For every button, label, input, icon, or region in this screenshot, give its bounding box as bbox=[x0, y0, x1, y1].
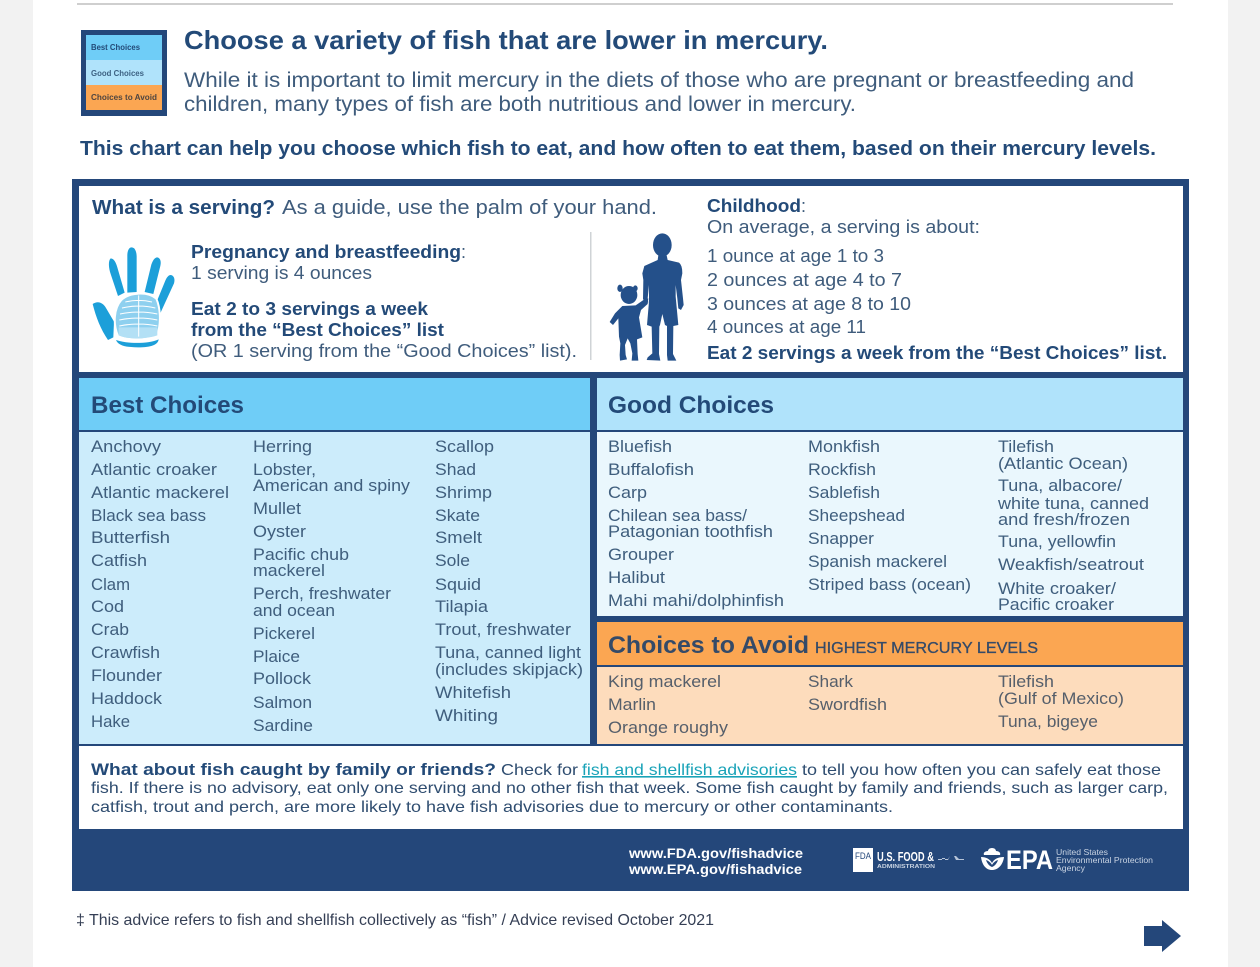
icon: chart legend thumbnail: Best Choices bbox=[91, 43, 141, 52]
icon: chart legend thumbnail: Choices to Avoid bbox=[91, 93, 157, 102]
good choices column 1: Mahi mahi/dolphinfish bbox=[608, 591, 784, 610]
best choices column 2: mackerel bbox=[253, 561, 325, 580]
best choices column 2 bbox=[253, 437, 411, 735]
icon: two children silhouette bbox=[610, 233, 684, 361]
best choices column 1: Atlantic mackerel bbox=[91, 483, 229, 502]
icon: EPA logo: Agency bbox=[1056, 863, 1086, 873]
panel: fish caught by family or friends: What about fish caught by family or friends? bbox=[91, 760, 496, 779]
panel: fish caught by family or friends bbox=[79, 746, 1183, 829]
footer band bbox=[628, 845, 1153, 877]
good choices column 3: Tilefish bbox=[998, 437, 1054, 456]
good choices column 3: Tuna, albacore/ bbox=[998, 476, 1122, 495]
title: Choose a variety of fish that are lower in mercury. bbox=[184, 25, 828, 55]
best choices column 1: Crab bbox=[91, 620, 129, 639]
footnote: ‡ This advice refers to fish and shellfish collectively as “fish” / Advice revised October 2021 bbox=[76, 912, 714, 929]
good choices column 1: Chilean sea bass/ bbox=[608, 506, 747, 525]
icon: chart legend thumbnail bbox=[81, 30, 167, 116]
icon: EPA logo bbox=[981, 845, 1153, 875]
childhood serving text: 3 ounces at age 8 to 10 bbox=[707, 294, 911, 314]
icon: EPA logo: EPA bbox=[1006, 845, 1053, 875]
good choices column 2: Monkfish bbox=[808, 437, 880, 456]
icon: FDA logo: U.S. FOOD & bbox=[877, 849, 934, 864]
panel: fish caught by family or friends: catfish, trout and perch, are more likely to have fish advisories due to mercury or other contaminants. bbox=[91, 799, 893, 816]
icon: EPA logo: Environmental Protection bbox=[1056, 855, 1153, 865]
good choices column 2: Striped bass (ocean) bbox=[808, 575, 971, 594]
best choices column 1: Haddock bbox=[91, 689, 163, 708]
choices to avoid list bbox=[608, 672, 1124, 737]
best choices column 2: Perch, freshwater bbox=[253, 584, 391, 603]
good choices column 3: Weakfish/seatrout bbox=[998, 555, 1144, 574]
serving heading: What is a serving? bbox=[92, 197, 275, 219]
good choices column 3 bbox=[997, 437, 1149, 614]
good choices column 3: and fresh/frozen bbox=[998, 510, 1130, 529]
icon: hand with fish bbox=[93, 247, 175, 347]
chart instruction heading: This chart can help you choose which fish to eat, and how often to eat them, based on their mercury levels. bbox=[80, 138, 1156, 160]
icon: FDA logo: ADMINISTRATION bbox=[877, 864, 935, 870]
choices to avoid heading: HIGHEST MERCURY LEVELS bbox=[815, 640, 1038, 657]
best choices column 2: Pacific chub bbox=[253, 545, 349, 564]
best choices column 3: Tuna, canned light bbox=[435, 643, 581, 662]
panel: fish caught by family or friends: fish. If there is no advisory, eat only one serving and no other fish that week. Some fish caught by family and friends, such as larger carp, bbox=[91, 780, 1168, 797]
best choices column 3: Sole bbox=[435, 551, 470, 570]
childhood serving text: 4 ounces at age 11 bbox=[707, 317, 866, 337]
best choices column 1: Butterfish bbox=[91, 528, 170, 547]
icon: FDA logo: FDA bbox=[855, 851, 871, 861]
good choices column 3: Tuna, yellowfin bbox=[998, 532, 1116, 551]
good choices column 2: Spanish mackerel bbox=[808, 552, 947, 571]
serving heading bbox=[92, 197, 657, 219]
icon: EPA logo: United States bbox=[1056, 847, 1108, 857]
childhood serving text: On average, a serving is about: bbox=[707, 217, 980, 237]
best choices column 2: Oyster bbox=[253, 522, 306, 541]
best choices column 1 bbox=[91, 437, 229, 731]
panel: good choices bbox=[597, 378, 1183, 616]
good choices column 2: Sheepshead bbox=[808, 506, 905, 525]
best choices column 2: Pickerel bbox=[253, 624, 315, 643]
panel: fish caught by family or friends: fish and shellfish advisories bbox=[582, 762, 797, 779]
pregnancy serving text: Pregnancy and breastfeeding bbox=[191, 242, 461, 262]
best choices column 2: Sardine bbox=[253, 716, 313, 735]
best choices column 3: Shad bbox=[435, 460, 476, 479]
pregnancy serving text: (OR 1 serving from the “Good Choices” list). bbox=[191, 341, 577, 361]
best choices column 1: Hake bbox=[91, 712, 130, 731]
choices to avoid list: Tuna, bigeye bbox=[998, 712, 1098, 731]
good choices column 3: Pacific croaker bbox=[998, 595, 1114, 614]
best choices heading: Best Choices bbox=[91, 392, 244, 419]
panel: best choices bbox=[79, 378, 590, 744]
pregnancy serving text: 1 serving is 4 ounces bbox=[191, 263, 372, 283]
best choices column 2: Lobster, bbox=[253, 460, 316, 479]
choices to avoid list: Shark bbox=[808, 672, 853, 691]
good choices column 2: Snapper bbox=[808, 529, 874, 548]
good choices column 1: Halibut bbox=[608, 568, 665, 587]
childhood serving text: 2 ounces at age 4 to 7 bbox=[707, 270, 902, 290]
serving heading: As a guide, use the palm of your hand. bbox=[282, 197, 657, 219]
good choices column 1: Patagonian toothfish bbox=[608, 522, 773, 541]
best choices column 1: Crawfish bbox=[91, 643, 160, 662]
choices to avoid list: King mackerel bbox=[608, 672, 721, 691]
pregnancy serving text: from the “Best Choices” list bbox=[191, 320, 444, 340]
choices to avoid heading bbox=[608, 632, 1038, 659]
childhood serving text: : bbox=[801, 196, 806, 216]
best choices column 3: Scallop bbox=[435, 437, 494, 456]
chart frame bbox=[72, 179, 1189, 891]
best choices column 3: Trout, freshwater bbox=[435, 620, 571, 639]
good choices column 1: Buffalofish bbox=[608, 460, 694, 479]
good choices column 1: Grouper bbox=[608, 545, 674, 564]
best choices column 3: Squid bbox=[435, 575, 481, 594]
best choices column 1: Atlantic croaker bbox=[91, 460, 217, 479]
choices to avoid list: (Gulf of Mexico) bbox=[998, 689, 1124, 708]
best choices column 3: Smelt bbox=[435, 528, 482, 547]
choices to avoid heading: Choices to Avoid bbox=[608, 632, 809, 659]
footer web addresses bbox=[628, 846, 804, 877]
best choices column 2: Salmon bbox=[253, 693, 312, 712]
childhood serving text: 1 ounce at age 1 to 3 bbox=[707, 246, 884, 266]
best choices column 3: (includes skipjack) bbox=[435, 660, 583, 679]
good choices column 1: Carp bbox=[608, 483, 647, 502]
best choices column 3: Shrimp bbox=[435, 483, 492, 502]
good choices column 3: white tuna, canned bbox=[997, 494, 1149, 513]
best choices column 3 bbox=[435, 437, 583, 725]
best choices column 3: Skate bbox=[435, 506, 480, 525]
best choices column 1: Catfish bbox=[91, 551, 147, 570]
childhood serving text: Childhood bbox=[707, 196, 801, 216]
good choices column 3: White croaker/ bbox=[998, 579, 1116, 598]
best choices column 1: Anchovy bbox=[91, 437, 162, 456]
panel: choices to avoid bbox=[597, 622, 1183, 744]
intro text: children, many types of fish are both nutritious and lower in mercury. bbox=[184, 93, 856, 116]
good choices column 2: Rockfish bbox=[808, 460, 876, 479]
best choices column 3: Whiting bbox=[435, 706, 498, 725]
childhood serving text: Eat 2 servings a week from the “Best Choices” list. bbox=[707, 343, 1167, 363]
best choices column 2: and ocean bbox=[253, 601, 335, 620]
best choices column 2: American and spiny bbox=[253, 476, 411, 495]
best choices column 1: Flounder bbox=[91, 666, 162, 685]
intro text: While it is important to limit mercury in the diets of those who are pregnant or breastfeeding and bbox=[184, 69, 1134, 92]
pregnancy serving text: : bbox=[461, 242, 466, 262]
best choices column 2: Plaice bbox=[253, 647, 300, 666]
good choices column 2: Sablefish bbox=[808, 483, 880, 502]
panel: what is a serving bbox=[79, 186, 1183, 372]
best choices column 2: Herring bbox=[253, 437, 312, 456]
icon: chart legend thumbnail: Good Choices bbox=[91, 69, 145, 78]
good choices heading: Good Choices bbox=[608, 392, 774, 419]
footer web addresses: www.EPA.gov/fishadvice bbox=[628, 862, 803, 877]
choices to avoid list: Marlin bbox=[608, 695, 656, 714]
best choices column 1: Clam bbox=[91, 575, 130, 594]
choices to avoid list: Swordfish bbox=[808, 695, 887, 714]
footer web addresses: www.FDA.gov/fishadvice bbox=[628, 846, 804, 861]
best choices column 1: Cod bbox=[91, 597, 124, 616]
best choices column 2: Pollock bbox=[253, 669, 312, 688]
good choices column 3: (Atlantic Ocean) bbox=[998, 454, 1128, 473]
pregnancy serving text: Eat 2 to 3 servings a week bbox=[191, 299, 429, 319]
icon: FDA logo bbox=[853, 848, 964, 872]
choices to avoid list: Orange roughy bbox=[608, 718, 729, 737]
good choices column 1 bbox=[608, 437, 784, 610]
panel: fish caught by family or friends: to tell you how often you can safely eat those bbox=[802, 762, 1161, 779]
arrow: next page bbox=[1144, 920, 1181, 952]
good choices column 1: Bluefish bbox=[608, 437, 672, 456]
best choices column 1: Black sea bass bbox=[91, 506, 206, 525]
pregnancy serving text bbox=[191, 242, 577, 361]
intro text bbox=[184, 69, 1134, 116]
best choices column 3: Tilapia bbox=[435, 597, 489, 616]
best choices column 3: Whitefish bbox=[435, 683, 511, 702]
childhood serving text bbox=[707, 196, 1167, 363]
good choices column 2 bbox=[808, 437, 971, 594]
choices to avoid list: Tilefish bbox=[998, 672, 1054, 691]
panel: fish caught by family or friends: Check for bbox=[501, 762, 579, 779]
best choices column 2: Mullet bbox=[253, 499, 301, 518]
